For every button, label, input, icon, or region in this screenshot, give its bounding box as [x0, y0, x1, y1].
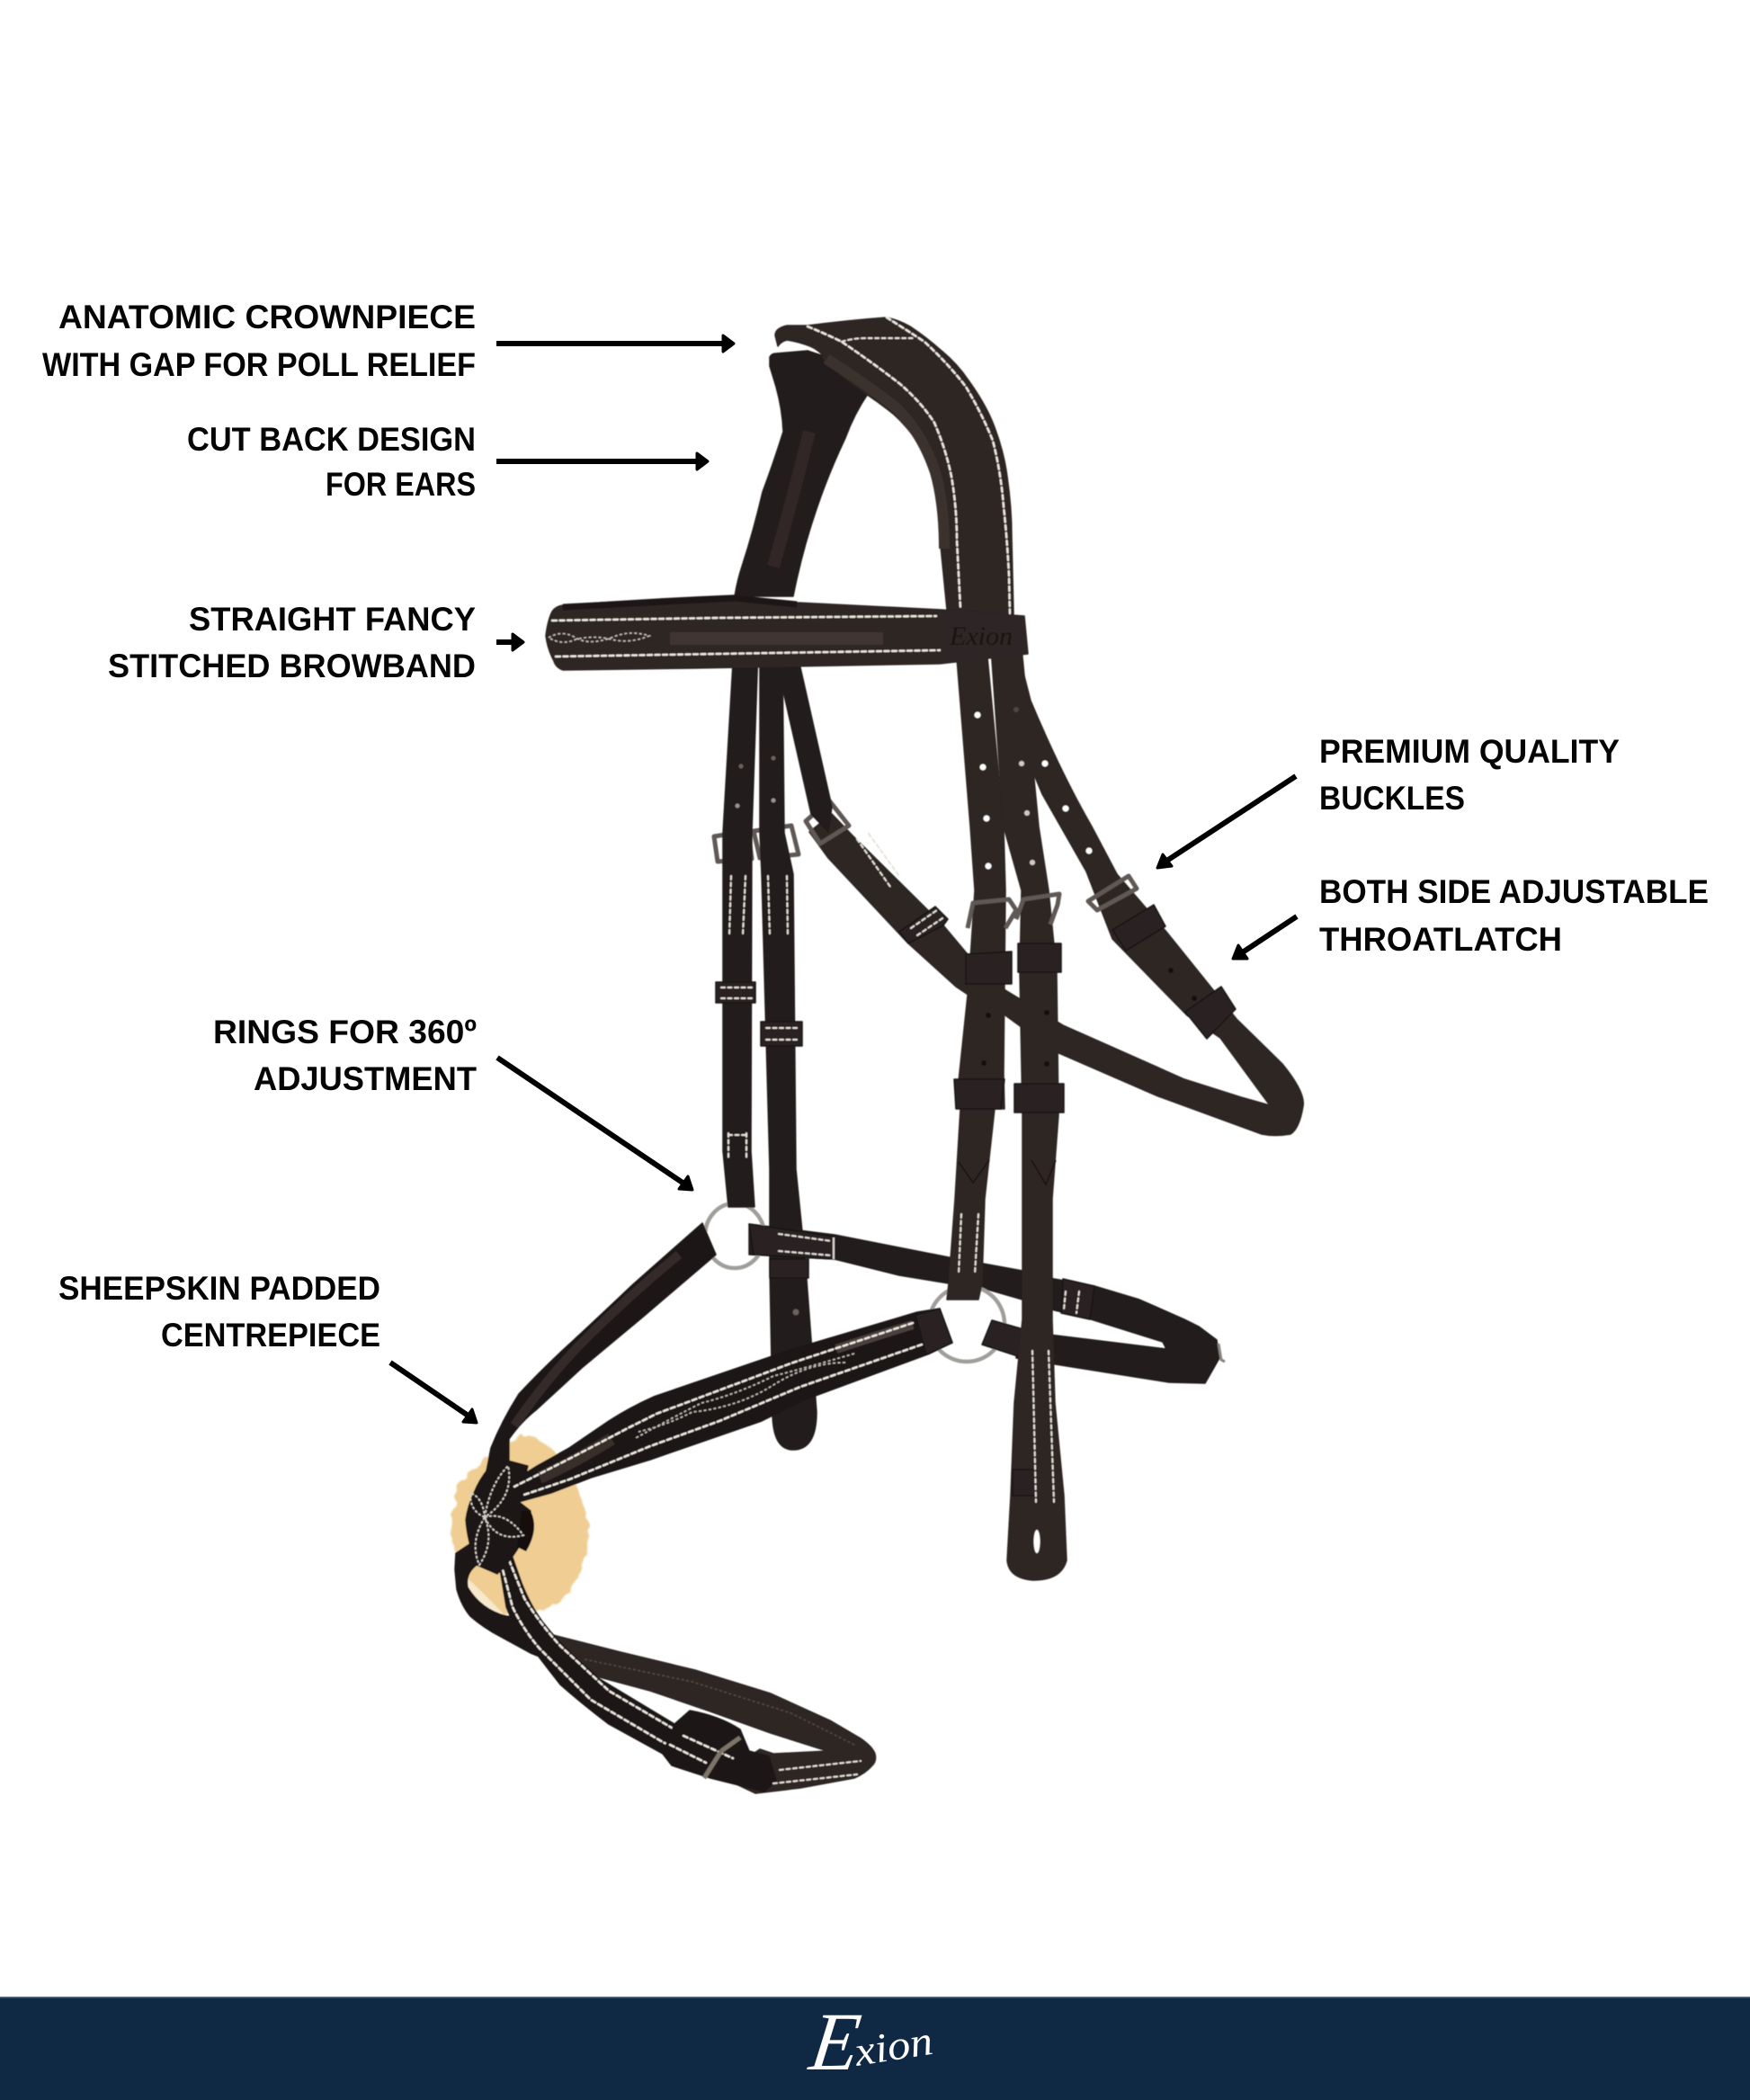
crownpiece front — [775, 317, 1013, 614]
label text: THROATLATCH — [1319, 920, 1562, 958]
padded back of crownpiece — [735, 351, 868, 596]
label text: WITH GAP FOR POLL RELIEF — [42, 345, 476, 383]
front strap — [497, 1550, 764, 1792]
label text: BUCKLES — [1319, 779, 1465, 817]
callout: anatomic crownpiece — [42, 298, 734, 383]
buckle flap — [663, 1711, 776, 1792]
arrow — [1233, 916, 1297, 959]
label text: SHEEPSKIN PADDED — [58, 1269, 380, 1307]
cheek strap B — [754, 648, 817, 1450]
callout: premium buckles — [1157, 732, 1620, 868]
label text: CENTREPIECE — [161, 1316, 380, 1354]
browband and crownpiece — [546, 317, 1028, 670]
logo: E — [803, 1996, 866, 2087]
stitched centrepiece — [466, 1459, 534, 1574]
cross strap of noseband — [749, 1224, 1225, 1383]
label text — [1319, 872, 1709, 958]
label text: STRAIGHT FANCY — [189, 600, 476, 638]
label text — [58, 1269, 380, 1354]
sheepskin padding — [451, 1434, 589, 1616]
embossed logo on keeper: Exion — [949, 621, 1013, 651]
logo: xion — [851, 2018, 936, 2075]
label text: FOR EARS — [326, 465, 476, 503]
arrow — [496, 335, 734, 352]
callout: sheepskin — [58, 1269, 477, 1423]
browband — [546, 595, 1028, 670]
arrow — [390, 1363, 477, 1423]
small keeper at right ring — [982, 1320, 1023, 1358]
label text — [1319, 732, 1620, 817]
label text — [108, 600, 476, 684]
bridle illustration — [451, 317, 1303, 1793]
back band — [455, 1542, 558, 1664]
label text: PREMIUM QUALITY — [1319, 732, 1620, 770]
callout: cut back design — [187, 420, 708, 503]
arrow — [1157, 776, 1296, 868]
logo — [803, 1996, 936, 2087]
arrow — [497, 1058, 692, 1190]
label text: ANATOMIC CROWNPIECE — [58, 298, 476, 335]
label text — [213, 1013, 477, 1097]
label text: CUT BACK DESIGN — [187, 420, 476, 458]
label text — [187, 420, 476, 503]
lower noseband loop — [455, 1542, 876, 1793]
keeper on cross strap — [749, 1224, 835, 1259]
ring right — [929, 1286, 1004, 1362]
label text — [42, 298, 476, 383]
upper loop band — [553, 1635, 876, 1793]
cheek strap E — [991, 648, 1067, 1580]
label text: BOTH SIDE ADJUSTABLE — [1319, 872, 1709, 910]
label text: RINGS FOR 360º — [213, 1013, 477, 1050]
right padded strip of noseband — [513, 1309, 952, 1502]
callout: throatlatch — [1233, 872, 1709, 959]
label text: STITCHED BROWBAND — [108, 647, 476, 684]
arrow — [496, 634, 523, 650]
callout: browband — [108, 600, 523, 684]
left padded strap of noseband — [486, 1223, 716, 1475]
footer bar — [0, 1996, 1750, 2100]
label text: ADJUSTMENT — [254, 1059, 477, 1097]
arrow — [496, 453, 708, 469]
throatlatch strap — [806, 648, 1303, 1135]
cheek strap D — [947, 648, 1016, 1300]
ring left — [705, 1203, 764, 1268]
cheek strap A — [714, 648, 758, 1207]
strap C to throatlatch buckle — [773, 648, 832, 832]
callout: rings — [213, 1013, 692, 1190]
